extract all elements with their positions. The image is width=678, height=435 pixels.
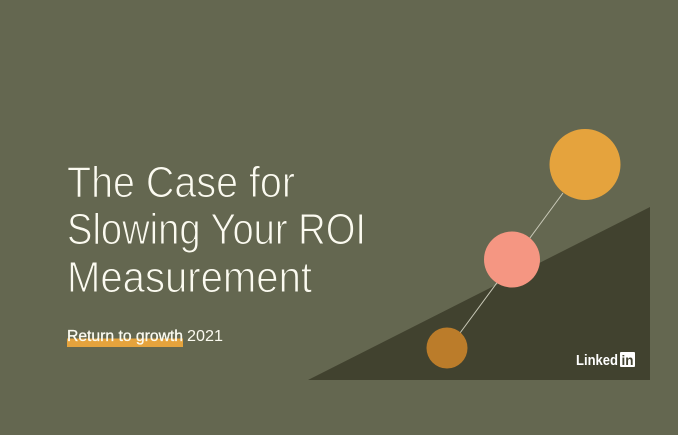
connector line <box>460 193 563 333</box>
large yellow circle <box>550 129 620 200</box>
pink circle <box>484 232 540 288</box>
subtitle with highlight: Return to growth <box>67 328 183 345</box>
slope triangle <box>308 207 650 380</box>
title: Measurement <box>67 253 312 302</box>
title <box>67 158 366 302</box>
title: The Case for <box>67 158 295 207</box>
subtitle with highlight: 2021 <box>187 328 223 345</box>
subtitle with highlight <box>67 328 223 347</box>
LinkedIn logo: Linked <box>576 353 618 369</box>
LinkedIn logo: in <box>622 352 634 368</box>
title: Slowing Your ROI <box>67 205 366 254</box>
small orange circle <box>426 328 468 368</box>
